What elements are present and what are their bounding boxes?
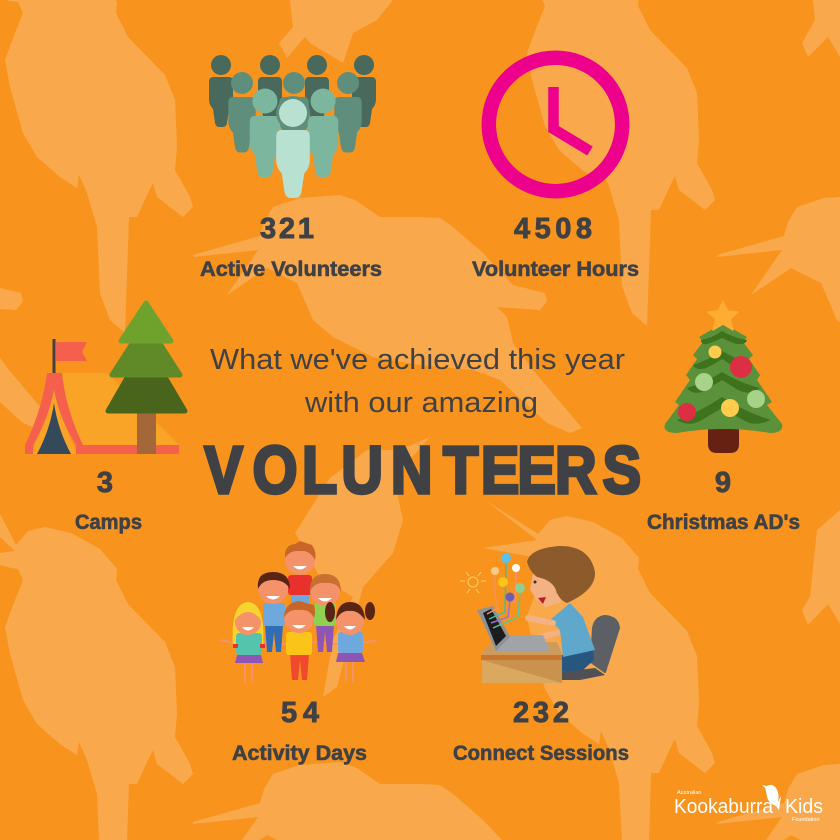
logo: Australian Kookaburra Kids Foundation: Kookaburra (674, 796, 774, 818)
title: VOLUNTEERS (204, 433, 641, 508)
heading: intro line: What we've achieved this year (210, 344, 625, 376)
icon: christmas tree (664, 301, 782, 453)
heading: intro line: with our amazing (304, 387, 538, 419)
child: right girl (310, 574, 341, 652)
stat: active volunteers (200, 213, 382, 281)
stat: activity days: Activity Days (232, 742, 367, 765)
heading: intro line (210, 344, 625, 419)
icon: tent and pine tree (25, 303, 185, 454)
child: centre boy (284, 601, 315, 680)
stat: christmas ads: Christmas AD's (647, 511, 800, 534)
illustration: group of children (221, 541, 376, 682)
stat: camps: Camps (75, 511, 142, 534)
logo: Australian Kookaburra Kids Foundation: Australian (677, 790, 701, 796)
child: left boy (258, 572, 290, 652)
stat: christmas ads (647, 467, 800, 534)
stat: volunteer hours (472, 213, 639, 281)
illustration: boy at laptop (460, 546, 619, 683)
stat: activity days (232, 697, 367, 765)
stat: camps: 3 (97, 467, 113, 499)
stat: activity days: 54 (281, 697, 319, 729)
logo: Australian Kookaburra Kids Foundation: Foundation (792, 817, 820, 823)
icon: volunteers group (209, 55, 376, 198)
child: top boy (285, 541, 316, 603)
stat: connect sessions: Connect Sessions (453, 742, 629, 765)
stat: active volunteers: Active Volunteers (200, 258, 382, 281)
stat: volunteer hours: 4508 (514, 213, 592, 245)
stat: active volunteers: 321 (260, 213, 314, 245)
logo: Australian Kookaburra Kids Foundation: Kids (785, 796, 823, 818)
logo: Australian Kookaburra Kids Foundation (674, 785, 823, 823)
stat: christmas ads: 9 (715, 467, 731, 499)
stat: connect sessions (453, 697, 629, 765)
stat: connect sessions: 232 (513, 697, 569, 729)
child: girl with pigtails (325, 602, 375, 662)
stat: camps (75, 467, 142, 534)
child: blonde girl (233, 602, 265, 663)
icon: clock (489, 58, 622, 191)
stat: volunteer hours: Volunteer Hours (472, 258, 639, 281)
